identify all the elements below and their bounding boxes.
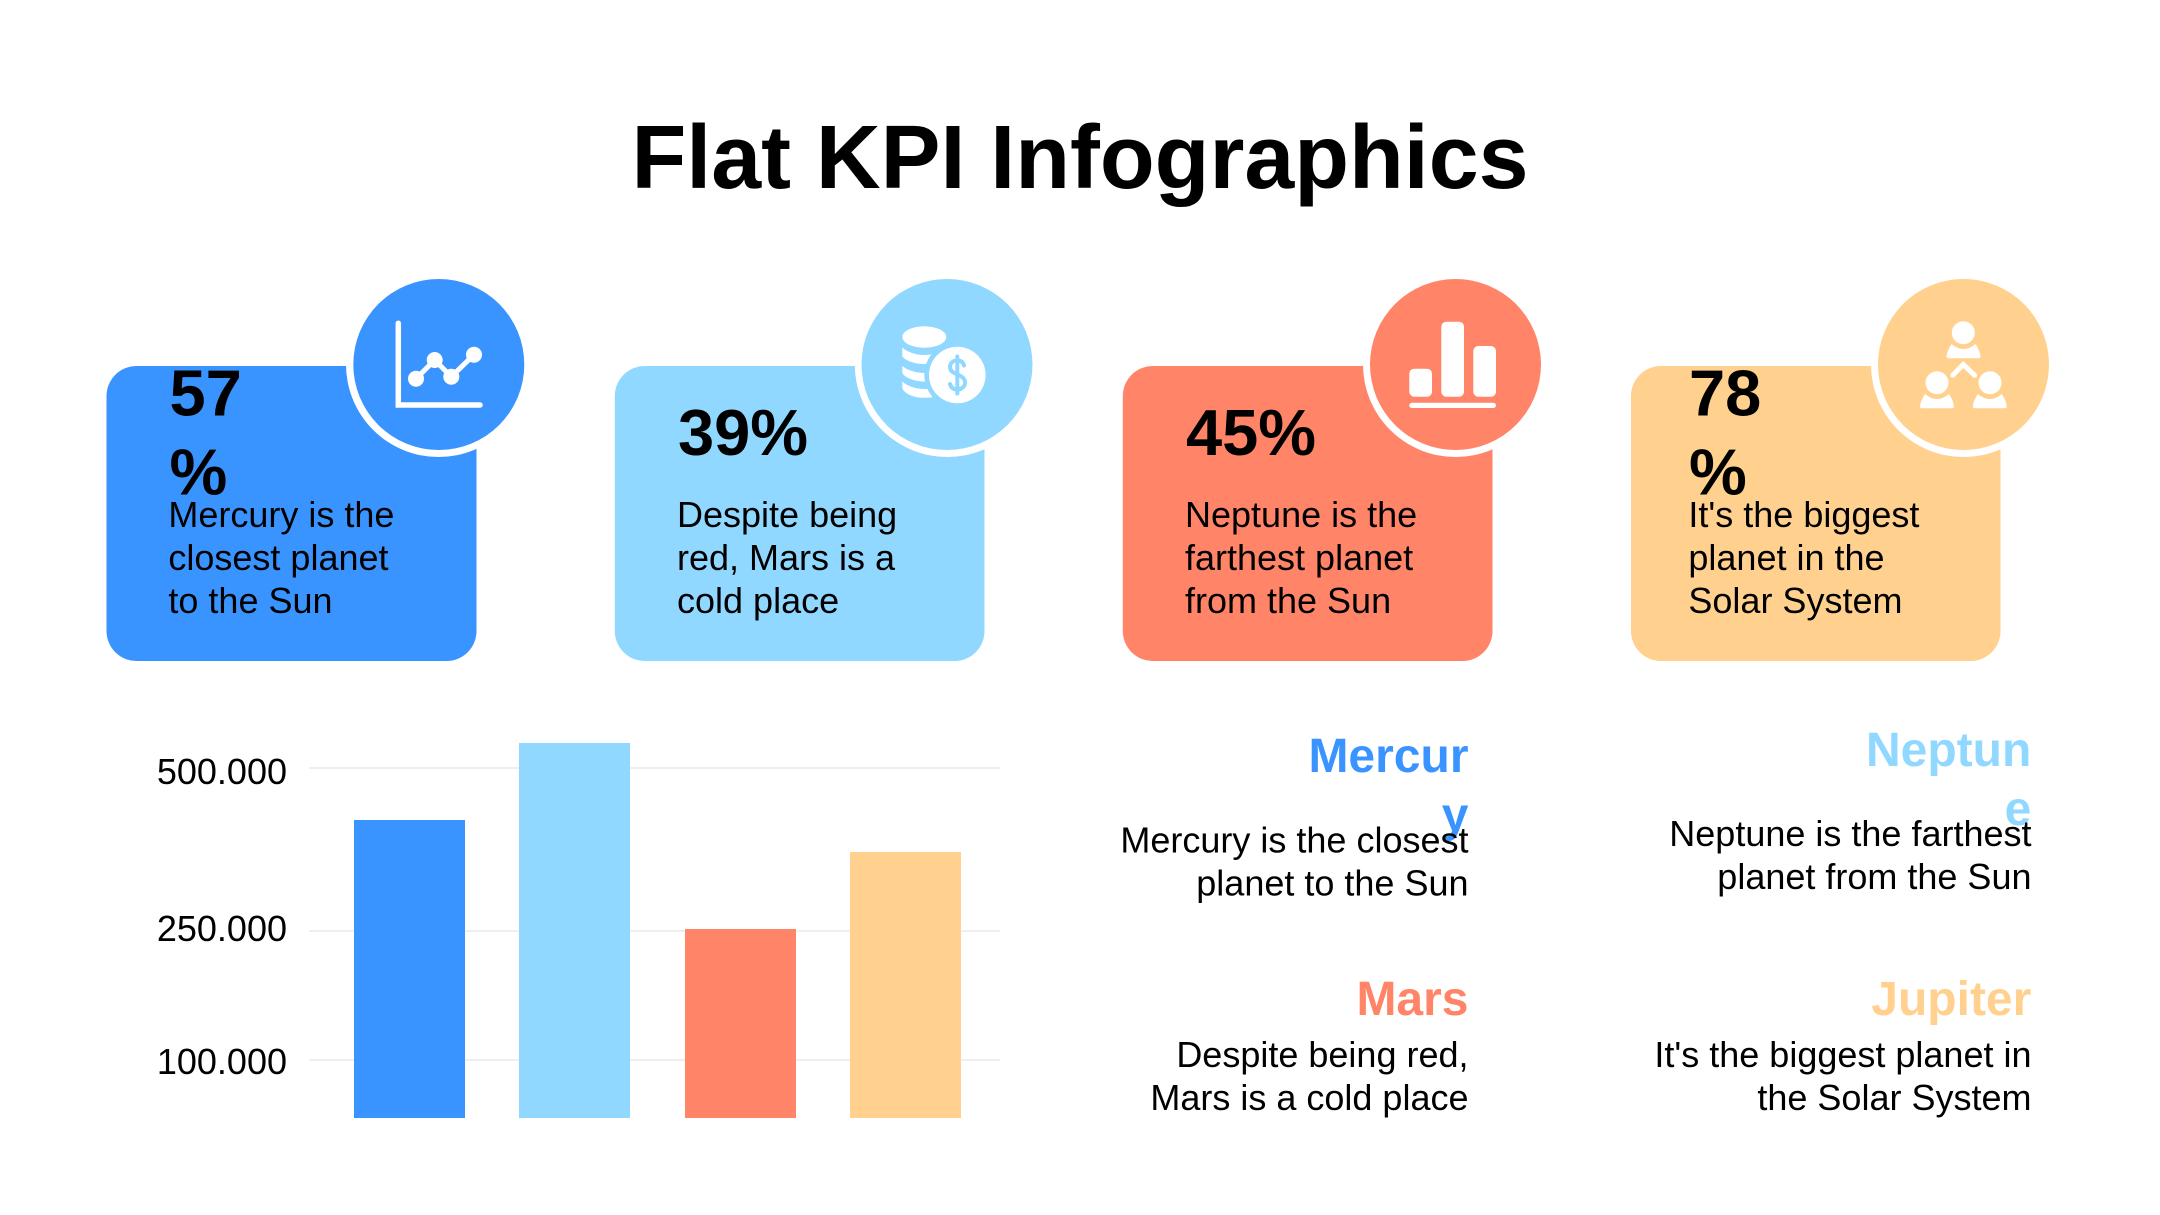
axis labels xyxy=(157,751,287,1082)
legend: Mercury: Mercury is the closest xyxy=(1120,820,1468,860)
icon ring xyxy=(855,272,1040,457)
KPI value: 39% xyxy=(678,396,808,469)
KPI description: Despite being xyxy=(677,494,897,535)
KPI value: 78 xyxy=(1689,356,1761,430)
legend: Neptune: planet from the Sun xyxy=(1717,856,2032,897)
bar: Neptune xyxy=(519,743,630,1118)
legend: Mars xyxy=(1150,973,1468,1118)
legend: Mars: Despite being red, xyxy=(1176,1034,1468,1075)
title: Flat KPI Infographics xyxy=(632,108,1528,208)
icon ring xyxy=(1871,272,2056,457)
KPI description: cold place xyxy=(677,580,839,621)
KPI description: red, Mars is a xyxy=(677,537,896,578)
legend: Jupiter: the Solar System xyxy=(1757,1077,2032,1118)
KPI description: It's the biggest xyxy=(1688,494,1919,535)
panel: KPI Mercury 57% xyxy=(106,272,531,661)
legend: Mercury: Mercur xyxy=(1308,730,1468,783)
icon: coins with dollar xyxy=(862,279,1032,450)
KPI value: 57 xyxy=(170,356,242,430)
KPI value: 45% xyxy=(1186,396,1316,469)
bar: Mars xyxy=(685,929,796,1118)
legend: Neptune xyxy=(1669,724,2032,897)
legend: Mercury xyxy=(1120,730,1469,904)
legend: Mercury: y xyxy=(1442,789,1469,842)
panel: KPI Jupiter 78% xyxy=(1631,272,2056,661)
KPI description: planet in the xyxy=(1688,537,1885,578)
card background: coral xyxy=(1123,366,1492,661)
panel: KPI Neptune 45% xyxy=(1123,272,1548,661)
KPI value: % xyxy=(1689,436,1747,508)
card background: blue xyxy=(106,366,476,661)
legend: Jupiter xyxy=(1654,973,2032,1118)
icon: line chart xyxy=(353,279,524,450)
icon ring xyxy=(346,272,531,457)
bar chart xyxy=(157,743,1000,1118)
card background: light blue xyxy=(615,366,984,661)
KPI description: closest planet xyxy=(168,537,389,578)
axis labels: 500.000 xyxy=(157,751,287,792)
legend: Neptune: Neptune is the farthest xyxy=(1669,813,2032,854)
icon: team of three people xyxy=(1878,279,2049,450)
card background: peach xyxy=(1631,366,2000,661)
legend: Jupiter: It's the biggest planet in xyxy=(1654,1034,2032,1075)
bar: Jupiter xyxy=(850,852,961,1118)
legend: Neptune: Neptun xyxy=(1866,724,2031,777)
KPI value: % xyxy=(170,436,227,508)
legend: Mars: Mars xyxy=(1356,973,1468,1026)
icon: bar chart xyxy=(1370,279,1541,450)
KPI description: Solar System xyxy=(1688,580,1902,621)
KPI description: Mercury is the xyxy=(168,494,394,535)
legend: Neptune: e xyxy=(2005,783,2031,836)
KPI description: from the Sun xyxy=(1185,580,1391,621)
legend: Mars: Mars is a cold place xyxy=(1150,1077,1468,1118)
legend: Jupiter: Jupiter xyxy=(1871,973,2031,1026)
panel: KPI Mars 39% xyxy=(615,272,1040,661)
bar: Mercury xyxy=(354,820,465,1118)
KPI description: farthest planet xyxy=(1185,537,1413,578)
KPI description: to the Sun xyxy=(168,580,333,621)
icon ring xyxy=(1363,272,1548,457)
legend: Mercury: planet to the Sun xyxy=(1196,862,1468,904)
axis labels: 250.000 xyxy=(157,908,287,949)
KPI description: Neptune is the xyxy=(1185,494,1417,535)
axis labels: 100.000 xyxy=(157,1041,287,1082)
